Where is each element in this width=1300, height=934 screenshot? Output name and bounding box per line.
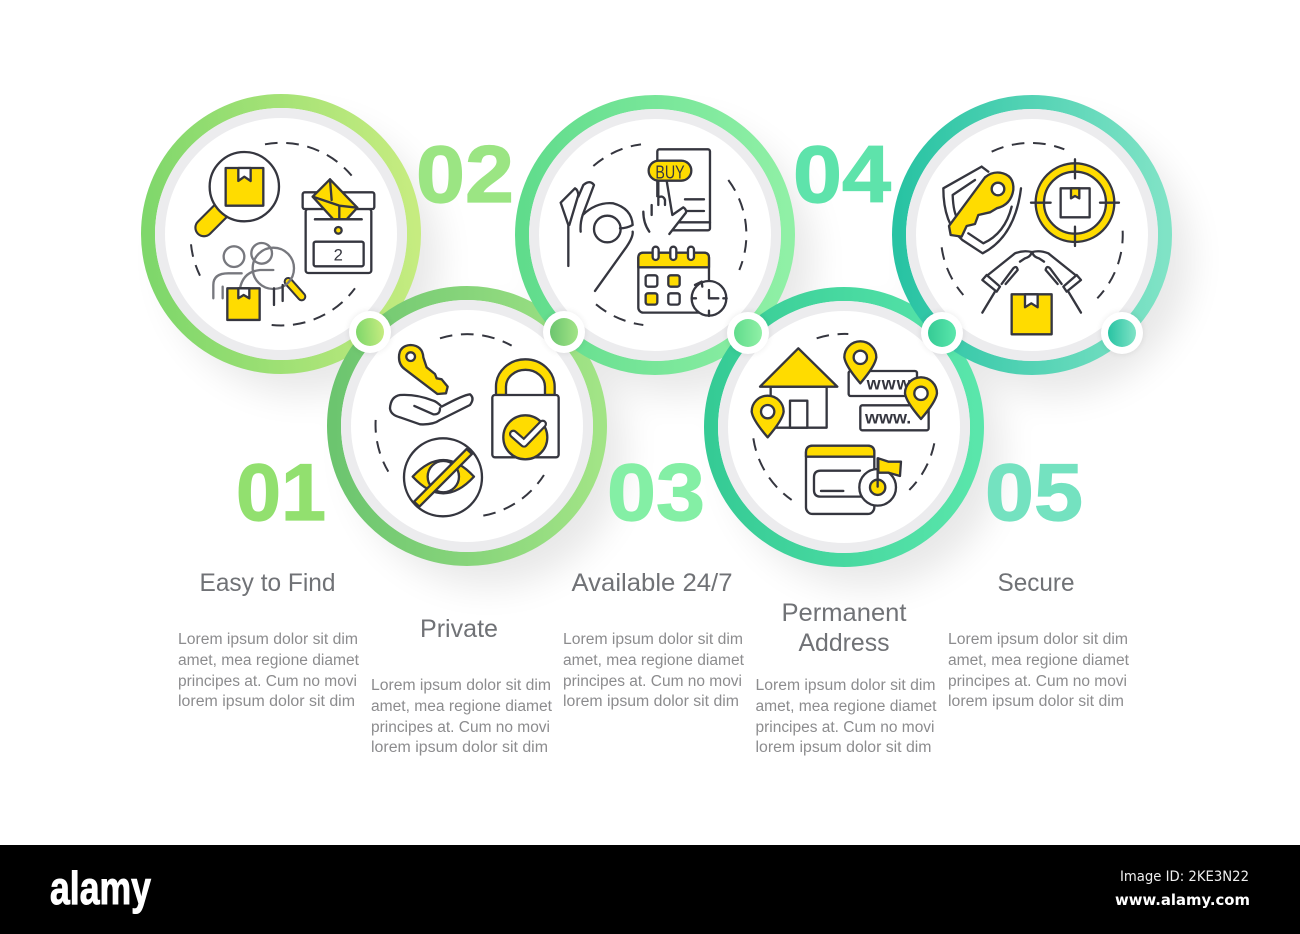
icon: permanent address bbox=[752, 334, 937, 514]
text block: Private: Private bbox=[420, 615, 498, 643]
footer website: www.alamy.com bbox=[1115, 891, 1250, 909]
text block: Easy to Find: Lorem ipsum dolor sit dim bbox=[178, 631, 358, 648]
panel: circle 3 Available 24/7 bbox=[522, 102, 788, 368]
text block: Private: amet, mea regione diamet bbox=[371, 698, 553, 715]
text block: Permanent Address: Address bbox=[798, 629, 890, 657]
text block: Secure: amet, mea regione diamet bbox=[948, 652, 1130, 669]
text block: Permanent Address: lorem ipsum dolor sit dim bbox=[756, 739, 932, 756]
connector dot 5 bbox=[1100, 311, 1144, 355]
text block: Permanent Address: Permanent bbox=[782, 599, 907, 627]
number 02: 02 bbox=[416, 130, 514, 220]
icon: permanent address: www. bbox=[864, 407, 911, 427]
text block: Available 24/7: amet, mea regione diamet bbox=[563, 652, 745, 669]
text block: Available 24/7 bbox=[563, 569, 745, 710]
connector dot 2 bbox=[542, 310, 586, 354]
text block: Private: lorem ipsum dolor sit dim bbox=[371, 739, 548, 756]
connector dot 4 bbox=[920, 311, 964, 355]
text block: Easy to Find: principes at. Cum no movi bbox=[178, 673, 357, 690]
text block: Permanent Address bbox=[756, 599, 937, 756]
panel: circle 1 Easy to Find bbox=[148, 101, 414, 367]
text block: Private bbox=[371, 615, 553, 756]
text block: Private: principes at. Cum no movi bbox=[371, 719, 550, 736]
text block: Easy to Find: Easy to Find bbox=[200, 569, 336, 597]
icon: private bbox=[376, 334, 559, 516]
icon: available bbox=[561, 144, 746, 325]
text block: Secure: lorem ipsum dolor sit dim bbox=[948, 693, 1124, 710]
number 04: 04 bbox=[793, 130, 891, 220]
text block: Secure bbox=[948, 569, 1130, 710]
panel: circle 4 Permanent Address bbox=[711, 294, 977, 560]
soft circle shadows bbox=[167, 122, 1190, 587]
number 03: 03 bbox=[607, 448, 705, 538]
icon: easy to find bbox=[191, 143, 374, 325]
icon: easy to find: 2 bbox=[334, 246, 343, 265]
connector dot 1 bbox=[348, 310, 392, 354]
panel: circle 5 Secure bbox=[899, 102, 1165, 368]
panel: circle 2 Private bbox=[334, 293, 600, 559]
number 05: 05 bbox=[985, 448, 1083, 538]
icon: secure bbox=[942, 143, 1123, 334]
text block: Available 24/7: Lorem ipsum dolor sit dim bbox=[563, 631, 743, 648]
text block: Easy to Find: amet, mea regione diamet bbox=[178, 652, 360, 669]
text block: Permanent Address: amet, mea regione diamet bbox=[756, 698, 937, 715]
text block: Secure: Lorem ipsum dolor sit dim bbox=[948, 631, 1128, 648]
number 01: 01 bbox=[236, 448, 326, 538]
icon: permanent address: www bbox=[866, 373, 912, 393]
connector dot 3 bbox=[726, 311, 770, 355]
footer band bbox=[0, 845, 1300, 934]
footer image id: Image ID: 2KE3N22 bbox=[1120, 869, 1249, 885]
text block: Secure: Secure bbox=[998, 569, 1074, 597]
text block: Available 24/7: principes at. Cum no movi bbox=[563, 673, 742, 690]
icon: available: BUY bbox=[655, 161, 685, 182]
text block: Private: Lorem ipsum dolor sit dim bbox=[371, 677, 551, 694]
text block: Available 24/7: lorem ipsum dolor sit dim bbox=[563, 693, 739, 710]
text block: Easy to Find bbox=[178, 569, 360, 710]
text block: Permanent Address: Lorem ipsum dolor sit dim bbox=[756, 677, 936, 694]
footer logo: alamy bbox=[50, 862, 151, 914]
text block: Permanent Address: principes at. Cum no movi bbox=[756, 719, 934, 736]
text block: Easy to Find: lorem ipsum dolor sit dim bbox=[178, 693, 355, 710]
text block: Available 24/7: Available 24/7 bbox=[572, 569, 732, 597]
text block: Secure: principes at. Cum no movi bbox=[948, 673, 1127, 690]
